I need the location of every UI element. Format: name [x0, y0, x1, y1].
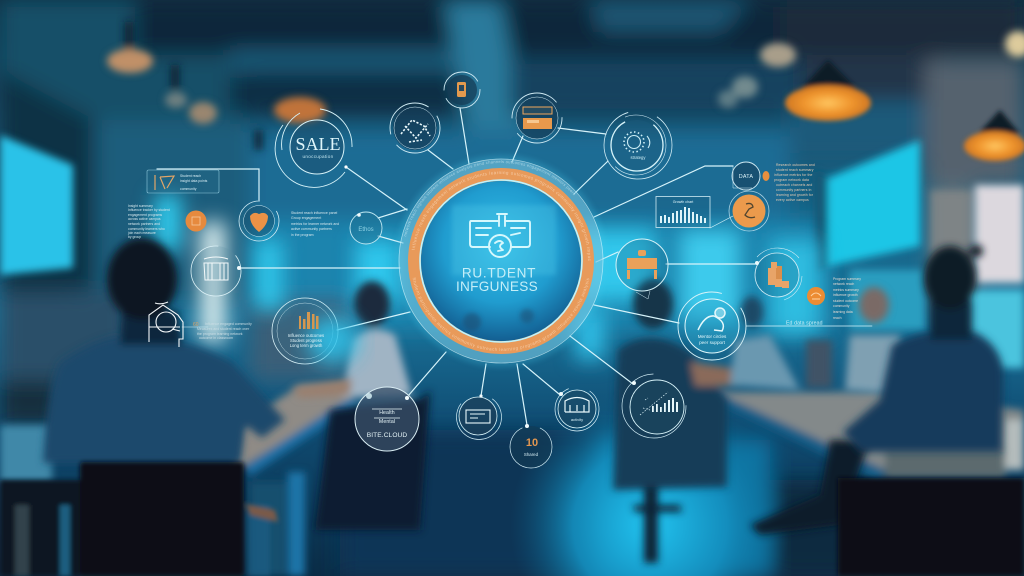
text block: far-left notes — [127, 204, 170, 239]
text block: mid-left notes: active community partners — [291, 227, 332, 231]
caption: right line label: Ed data spread — [786, 320, 823, 326]
checklist rows: Health — [379, 410, 395, 416]
chart box — [656, 196, 710, 228]
node: small label circle — [350, 212, 382, 244]
text block: right side notes: influence metrics for the — [774, 173, 813, 177]
icon: orange heart — [250, 213, 268, 232]
text block: right side notes: program network data — [774, 178, 809, 182]
text block: mid-left notes: Group engagement — [291, 216, 321, 220]
node: mentor: Mentor circles — [698, 334, 727, 339]
node: gear: strategy — [631, 155, 646, 160]
node: mentor — [678, 292, 746, 360]
text block: mid-left notes — [291, 211, 339, 237]
text block: mid-left notes: Student reach influence panel — [291, 211, 338, 215]
node: heart — [239, 201, 279, 241]
panel: top-left labelled card: insight data points — [180, 179, 208, 183]
text block: right side notes: community partners in — [776, 188, 811, 192]
node: document — [456, 394, 502, 440]
foreground chairs — [0, 462, 1024, 576]
tables — [0, 385, 1024, 576]
text block: right side notes: learning and growth for — [776, 193, 814, 197]
icon: building — [204, 257, 228, 280]
text block: left lower notes: Measures and student reach over — [197, 327, 250, 331]
text block: far-left notes: Insight summary — [128, 204, 153, 208]
small orange dot right — [807, 287, 825, 305]
hub title: RU.TDENT — [462, 266, 536, 280]
foreground person left — [43, 238, 285, 463]
node: mini label circle — [732, 162, 770, 190]
icon: house with magnifier — [149, 302, 183, 347]
central hub: INFGUNESS — [456, 279, 538, 294]
node: orange desk — [616, 239, 668, 299]
text block: right side notes: every active campus — [776, 198, 809, 202]
text block: right edge notes: influence growth — [833, 293, 858, 297]
bar chart caption: Long term growth — [290, 343, 323, 348]
node: orange badge bottom — [510, 424, 552, 468]
central hub — [393, 154, 609, 368]
text block: right side notes: outreach channels and — [776, 183, 812, 187]
checklist rows: BITE.CLOUD — [367, 432, 407, 439]
text block: right edge notes: network reach — [833, 282, 854, 286]
bar chart caption: Student progress — [290, 338, 322, 343]
text block: right edge notes: community — [833, 304, 850, 308]
panel: top-left labelled card: Student reach — [180, 174, 201, 178]
people in the background — [292, 279, 905, 563]
node: orange box — [512, 93, 562, 143]
node: gear — [604, 111, 672, 179]
bar chart caption — [288, 333, 324, 348]
icon: figure — [698, 308, 725, 331]
node: checklist — [355, 387, 419, 451]
text block: right edge notes: metrics summary — [833, 288, 859, 292]
text block: far-left notes: by group — [128, 235, 141, 239]
icon: gear — [624, 132, 650, 152]
text block: left lower notes: the program learning network — [197, 332, 243, 336]
node: orange badge bottom: Shared — [524, 452, 539, 457]
ring micro text: Influence reach engagement network students learning outcomes programs community insight growth impact data — [412, 170, 590, 261]
node: mini label circle: DATA — [739, 174, 753, 180]
icon: gauge frame — [565, 398, 589, 412]
text block: far-left notes: Influence tracker by student — [128, 208, 170, 212]
icon: profile — [745, 203, 755, 218]
text block: far-left notes: engagement programs — [128, 213, 162, 217]
hub core — [421, 181, 581, 341]
text block: far-left notes: across active campus — [128, 217, 161, 221]
mid room glows — [155, 195, 820, 360]
text block: far-left notes: join each measure — [127, 231, 156, 235]
text block: far-left notes: network partners and — [128, 222, 160, 226]
node: gauge — [555, 387, 599, 431]
icon: desk — [627, 250, 657, 279]
text block: far-left notes: community learners who — [128, 227, 165, 231]
chart box: Growth chart — [673, 200, 693, 204]
central hub: network reach signals student influence analysis trend channels outcomes engagement mentors peers — [404, 160, 575, 236]
bars — [660, 207, 706, 223]
lamps — [107, 22, 1024, 161]
wall screens and windows — [0, 135, 1024, 368]
bar chart caption: Influence outcomes — [288, 333, 324, 338]
node: phone — [444, 72, 480, 108]
text block: left lower notes: 60 — [193, 322, 199, 328]
node: small label circle: Ethos — [358, 227, 374, 233]
node: sale badge — [275, 109, 352, 187]
node: network pattern — [390, 103, 440, 153]
text block: right edge notes: student outcome — [833, 299, 858, 303]
icon: scattered network — [401, 120, 430, 142]
icon: card glyph — [155, 175, 174, 190]
icon: bars and scatter — [652, 398, 678, 412]
outer translucent ring — [404, 164, 598, 358]
foreground person right — [843, 245, 1003, 452]
ring micro text: Student participation metrics community outreach learning programs growth influence results analysis — [412, 278, 590, 351]
checklist rows — [367, 410, 407, 439]
text block: left lower notes: Influence engaged community — [205, 322, 252, 326]
node: gauge: activity — [571, 417, 583, 422]
node: building — [191, 246, 241, 296]
node: orange blocks — [755, 248, 802, 300]
panel: top-left labelled card — [147, 170, 219, 193]
node: sale badge: unoccupation — [303, 154, 334, 159]
floor glow — [510, 385, 800, 576]
text block: right edge notes: reach — [833, 316, 842, 320]
text block: right edge notes: Program summary — [833, 277, 861, 281]
panel: top-left labelled card: community — [180, 187, 197, 191]
icon: document — [466, 410, 490, 423]
connector lines — [157, 108, 872, 425]
node: bar chart orange — [272, 298, 359, 364]
text block: left lower notes: outcome in classroom — [199, 336, 233, 340]
checklist rows: Mental — [379, 419, 395, 425]
text block: right edge notes: learning data — [833, 310, 853, 314]
node: sale badge: SALE — [296, 134, 341, 154]
icon: crate — [523, 107, 552, 129]
node: orange filled circle — [729, 191, 769, 231]
orange ring — [414, 174, 588, 348]
node: mentor: peer support — [699, 340, 726, 345]
text block: right side notes: Research outcomes and — [776, 163, 815, 167]
text: badge number: 10 — [526, 437, 538, 449]
text block: mid-left notes: metrics for learner network and — [291, 222, 339, 226]
icon: hub device — [470, 214, 530, 257]
node: trend chart — [622, 374, 686, 438]
text block: right side notes: student reach summary — [776, 168, 814, 172]
text block: right edge notes — [833, 277, 861, 320]
text block: right side notes — [774, 163, 815, 202]
text block: left lower notes — [193, 322, 252, 340]
text block: mid-left notes: in the program — [291, 233, 314, 237]
badge: small orange circle left — [186, 210, 206, 232]
hub glow — [395, 155, 607, 367]
icon: blocks — [768, 262, 789, 288]
glow: cyan spot — [307, 316, 359, 364]
ring micro text — [412, 170, 590, 351]
icon: phone — [457, 82, 466, 97]
icon: orange bars — [299, 312, 318, 329]
